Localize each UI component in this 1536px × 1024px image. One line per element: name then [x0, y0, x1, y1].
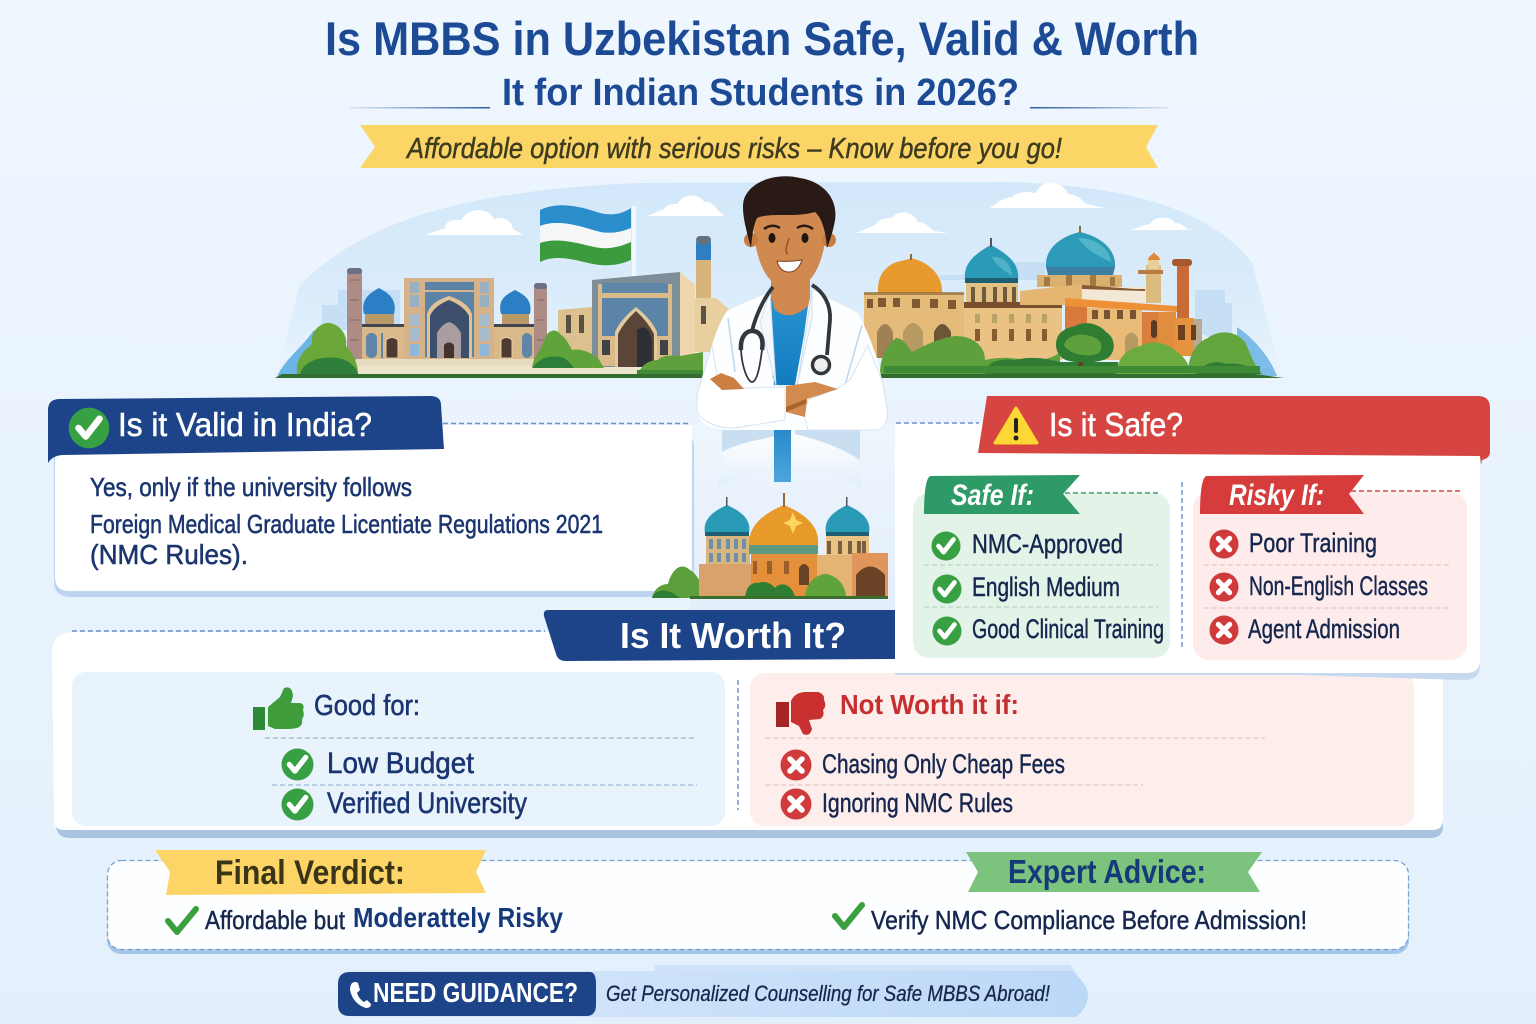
item: clinical training: Good Clinical Training: [972, 614, 1164, 644]
title: It for Indian Students in 2026?: [502, 72, 1019, 114]
hand: [710, 373, 744, 390]
verdict text: Moderattely Risky: [353, 902, 563, 933]
panel: verdict and advice: [107, 850, 1409, 954]
panel: is it safe: [895, 396, 1490, 680]
subtitle ribbon: [360, 125, 1158, 168]
item: English medium: English Medium: [972, 572, 1120, 602]
bushes left: [297, 323, 703, 378]
coat lower shadow: [722, 428, 860, 460]
header: worth it: Is It Worth It?: [620, 615, 846, 656]
doctor centre column: [691, 423, 896, 610]
item: English medium: [932, 572, 1120, 604]
ribbon: risky if: [1200, 475, 1364, 514]
item: verified university: Verified University: [327, 787, 527, 820]
item: clinical training: [932, 614, 1164, 646]
item: cheap fees: [780, 749, 1065, 780]
ribbon: safe if: Safe If:: [951, 479, 1034, 512]
coat lapels: [760, 290, 812, 386]
item: NMC approved: [931, 529, 1123, 561]
ribbon: expert advice: Expert Advice:: [1008, 853, 1206, 890]
item: non-English classes: Non-English Classes: [1249, 571, 1428, 601]
icon: check: [69, 408, 109, 448]
subtitle ribbon: Affordable option with serious risks – Know before you go!: [405, 133, 1062, 165]
ribbon: final verdict: [155, 850, 486, 895]
stethoscope: [741, 285, 830, 382]
panel: is it valid in India: [48, 396, 694, 597]
item: agent admission: [1209, 614, 1400, 645]
scarf strip: [774, 410, 791, 482]
icon: thumbs down: [776, 692, 825, 735]
item: poor training: Poor Training: [1249, 528, 1377, 558]
distant skyline: [322, 262, 1232, 350]
head: [753, 208, 827, 289]
flag of Uzbekistan: [540, 205, 636, 276]
header: worth it: [544, 610, 895, 661]
ribbon: safe if: [924, 475, 1080, 514]
panel: is it worth it: [52, 610, 1443, 838]
madrasa left: [316, 268, 640, 374]
header: valid: Is it Valid in India?: [118, 406, 372, 443]
hair: [743, 176, 835, 248]
verdict text: [168, 902, 563, 935]
call to action banner: [338, 965, 1088, 1017]
face: [764, 226, 813, 272]
doctor illustration: [697, 176, 888, 487]
cta text: Get Personalized Counselling for Safe MBBS Abroad!: [606, 981, 1050, 1006]
sky backdrop: [276, 182, 1282, 378]
illustration: skyline scene: [275, 182, 1284, 378]
icon: phone: [350, 982, 371, 1008]
neck: [771, 270, 810, 316]
left arm: [697, 345, 785, 428]
item: ignoring NMC: Ignoring NMC Rules: [822, 788, 1013, 818]
title: [325, 12, 1199, 114]
good for list: Good for:: [314, 690, 420, 722]
ribbon: final verdict: Final Verdict:: [215, 854, 405, 892]
header: safe: [978, 396, 1490, 465]
header: valid: [48, 396, 444, 463]
item: ignoring NMC: [780, 788, 1013, 820]
safe if list: [913, 475, 1170, 658]
item: NMC approved: NMC-Approved: [972, 529, 1123, 559]
small mosque illustration: [652, 493, 888, 599]
right city complex: [864, 226, 1202, 360]
university building left: [558, 236, 730, 367]
forearm: [786, 382, 838, 417]
coat upper: [697, 290, 887, 430]
item: non-English classes: [1209, 571, 1428, 602]
item: cheap fees: Chasing Only Cheap Fees: [822, 749, 1065, 779]
item: verified university: [282, 787, 527, 820]
item: agent admission: Agent Admission: [1248, 614, 1400, 644]
ribbon: risky if: Risky If:: [1229, 479, 1324, 512]
verdict text: Affordable but: [205, 905, 346, 935]
header: safe: Is it Safe?: [1049, 406, 1183, 443]
item: low budget: Low Budget: [327, 747, 475, 780]
clouds: [425, 183, 1196, 235]
scrub top: [771, 296, 808, 385]
ground: [275, 374, 1284, 378]
title: Is MBBS in Uzbekistan Safe, Valid & Worth: [325, 12, 1199, 65]
not worth it list: Not Worth it if:: [840, 689, 1019, 720]
text: valid answer: Foreign Medical Graduate Licentiate Regulations 2021: [90, 509, 603, 539]
risky if list: [1193, 475, 1467, 660]
not worth it list: [750, 673, 1414, 826]
icon: thumbs up: [253, 687, 304, 730]
good for list: [72, 672, 725, 826]
cta label: NEED GUIDANCE?: [373, 977, 578, 1008]
advice text: Verify NMC Compliance Before Admission!: [871, 905, 1307, 935]
trees right: [880, 323, 1262, 374]
text: valid answer: [90, 472, 603, 570]
text: valid answer: Yes, only if the university follows: [90, 472, 412, 502]
coat lower: [718, 428, 862, 487]
blue hills: [277, 330, 330, 377]
text: valid answer: (NMC Rules).: [90, 539, 248, 570]
item: poor training: [1209, 528, 1377, 559]
right arm: [804, 345, 888, 430]
icon: warning: [995, 408, 1037, 443]
